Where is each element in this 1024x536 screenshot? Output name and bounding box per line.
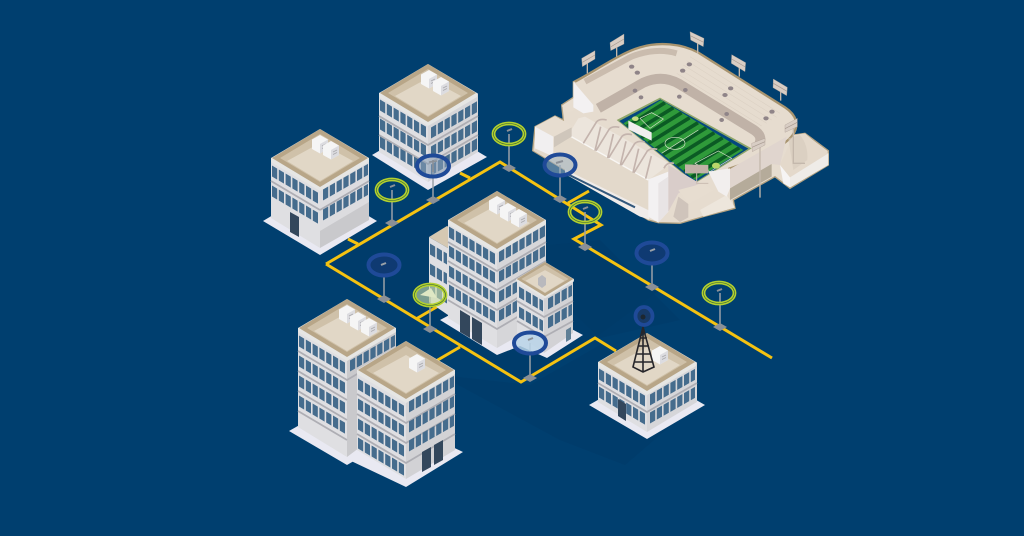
- stand face over pitch: [628, 121, 652, 141]
- floodlights: [582, 32, 805, 198]
- icon: radio tower: [633, 307, 654, 372]
- stadium: [533, 32, 828, 223]
- rear wing: [429, 226, 466, 315]
- stadium upper rim: [575, 44, 796, 169]
- pole: blue ring east: [636, 242, 668, 291]
- scoreboard: [685, 164, 708, 183]
- pole: lime ring east: [704, 282, 734, 331]
- pole: blue ring south: [514, 332, 546, 382]
- east side and annex: [730, 133, 828, 200]
- main tower: [448, 191, 546, 348]
- gate and stairs: [668, 165, 735, 222]
- building: tower base: [589, 333, 705, 439]
- pole: lime ring top: [494, 124, 524, 172]
- centre plate: [440, 290, 583, 358]
- upper concourse shade: [585, 51, 677, 82]
- left block: [535, 82, 593, 157]
- building: lower-left tall: [289, 299, 405, 465]
- pole: blue ring stadium: [544, 154, 576, 203]
- pole: lime ring centre: [414, 284, 446, 333]
- sensor poles: [368, 124, 734, 382]
- pole: lime ring left: [376, 180, 408, 227]
- pole: blue ring west: [368, 254, 400, 303]
- ground shadows: [326, 162, 695, 465]
- stadium base: [533, 44, 828, 223]
- building: centre complex: [429, 191, 583, 358]
- network lines: [326, 162, 772, 382]
- concourse band: [598, 79, 760, 144]
- pole: blue ring top building: [417, 156, 449, 204]
- main stand: [533, 117, 670, 220]
- roof trusses: [583, 119, 674, 179]
- building: top three-storey: [372, 64, 487, 190]
- building: left two-storey: [263, 129, 377, 255]
- stand tower: [648, 172, 668, 223]
- building: lower-left front: [349, 341, 463, 487]
- pitch: [617, 98, 752, 183]
- small wing: [516, 262, 574, 353]
- seating rows: [677, 57, 780, 126]
- vomitories: [629, 62, 775, 122]
- pole: lime ring stadium: [570, 202, 600, 251]
